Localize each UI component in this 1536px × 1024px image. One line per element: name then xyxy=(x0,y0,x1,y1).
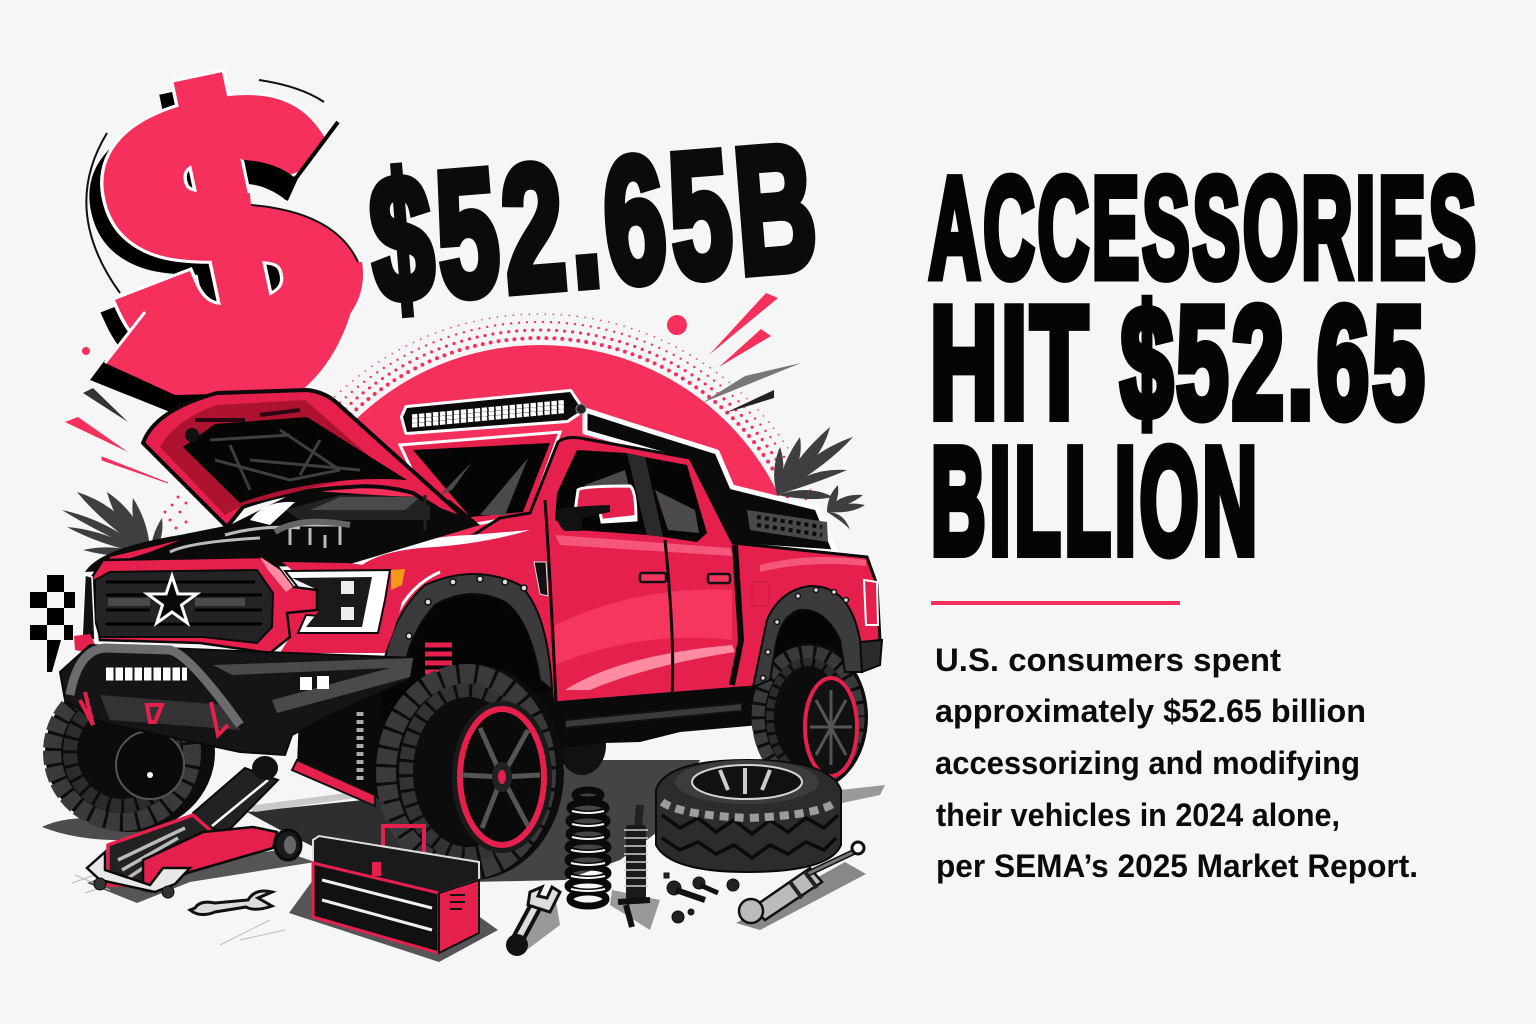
divider xyxy=(931,601,1180,605)
body text: per SEMA’s 2025 Market Report. xyxy=(936,848,1418,884)
spare tire xyxy=(656,760,841,872)
rear wheel well xyxy=(762,610,852,690)
icon: big dollar sign: $ xyxy=(61,20,372,467)
door seams xyxy=(545,500,673,703)
body text: U.S. consumers spent xyxy=(935,642,1281,678)
body text: approximately $52.65 billion xyxy=(935,693,1366,729)
ground shadows xyxy=(42,760,885,962)
floor jack xyxy=(87,756,301,898)
body text xyxy=(935,642,1418,884)
coil spring xyxy=(568,790,608,906)
front bumper xyxy=(60,645,415,755)
palm leaves left xyxy=(62,492,162,560)
grille xyxy=(95,570,273,643)
rear wheel xyxy=(752,643,868,791)
front wheel arch flare xyxy=(380,572,552,720)
toolbox xyxy=(313,826,479,953)
far front tyre xyxy=(558,715,606,775)
left side bracket xyxy=(82,575,95,640)
red coil xyxy=(425,645,452,681)
open hood xyxy=(143,390,467,530)
headline xyxy=(929,149,1479,585)
running board xyxy=(565,703,742,728)
icon: big dollar sign: $ xyxy=(74,7,385,454)
door handles xyxy=(640,573,666,582)
body text: their vehicles in 2024 alone, xyxy=(936,797,1340,833)
rear bumper end xyxy=(860,640,882,672)
icon: star emblem xyxy=(147,576,197,623)
nuts and bolts xyxy=(664,873,739,923)
side mirror xyxy=(557,486,636,531)
windshield xyxy=(400,432,560,530)
engine bay xyxy=(85,490,480,572)
front shock xyxy=(356,712,364,780)
large wrench xyxy=(506,887,560,956)
side windows xyxy=(555,450,707,542)
icon: big dollar sign: $ xyxy=(74,7,385,454)
LED light bar xyxy=(403,392,586,432)
stat: $52.65B: $52.65B xyxy=(363,106,828,340)
cargo rack xyxy=(585,410,835,552)
small wrench xyxy=(190,891,272,915)
tail light xyxy=(864,580,878,625)
front left tyre xyxy=(45,672,215,832)
body text: accessorizing and modifying xyxy=(935,745,1360,781)
strut part xyxy=(739,842,864,923)
underbody chassis xyxy=(297,670,760,800)
rear wheel arch flare xyxy=(753,586,862,687)
fuel door xyxy=(752,582,769,606)
checkered flag xyxy=(30,575,75,672)
vent xyxy=(534,562,548,596)
accent sparks xyxy=(65,293,801,530)
palm leaves right xyxy=(774,427,865,530)
front fascia xyxy=(74,557,410,655)
suspension arm xyxy=(292,760,375,806)
truck xyxy=(45,390,882,880)
body highlights xyxy=(347,530,530,565)
front wheel xyxy=(380,664,564,880)
truck body xyxy=(347,438,882,703)
sunburst circle with halftone dots xyxy=(320,313,812,538)
headlight xyxy=(285,569,405,633)
grille surround xyxy=(92,557,317,653)
shock absorber xyxy=(618,805,650,927)
